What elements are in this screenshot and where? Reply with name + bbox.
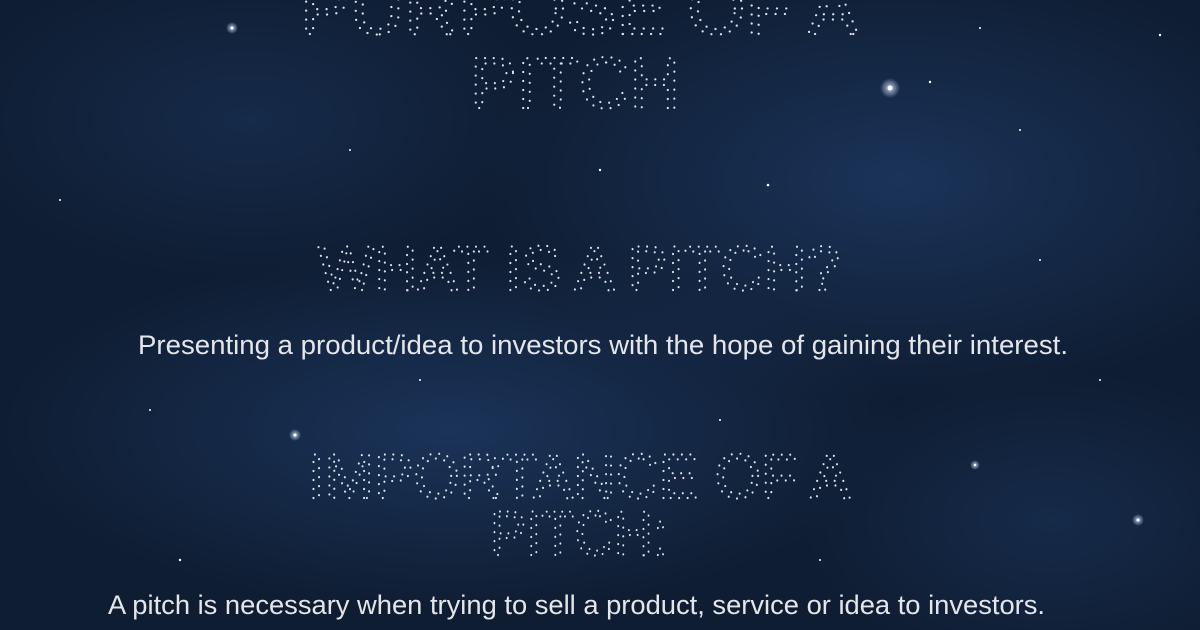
heading: what is a pitch: WHAT IS A PITCH? <box>318 234 840 304</box>
heading: importance of a pitch: IMPORTANCE OF A <box>308 442 850 512</box>
title: PITCH <box>470 44 680 124</box>
title <box>300 0 858 124</box>
stars <box>59 22 1161 561</box>
text: importance: A pitch is necessary when trying to sell a product, service or idea to investors. <box>108 590 1045 620</box>
text: definition: Presenting a product/idea to investors with the hope of gaining their interest. <box>138 330 1068 360</box>
heading: importance of a pitch <box>308 442 850 569</box>
heading: importance of a pitch: PITCH: <box>490 499 668 569</box>
